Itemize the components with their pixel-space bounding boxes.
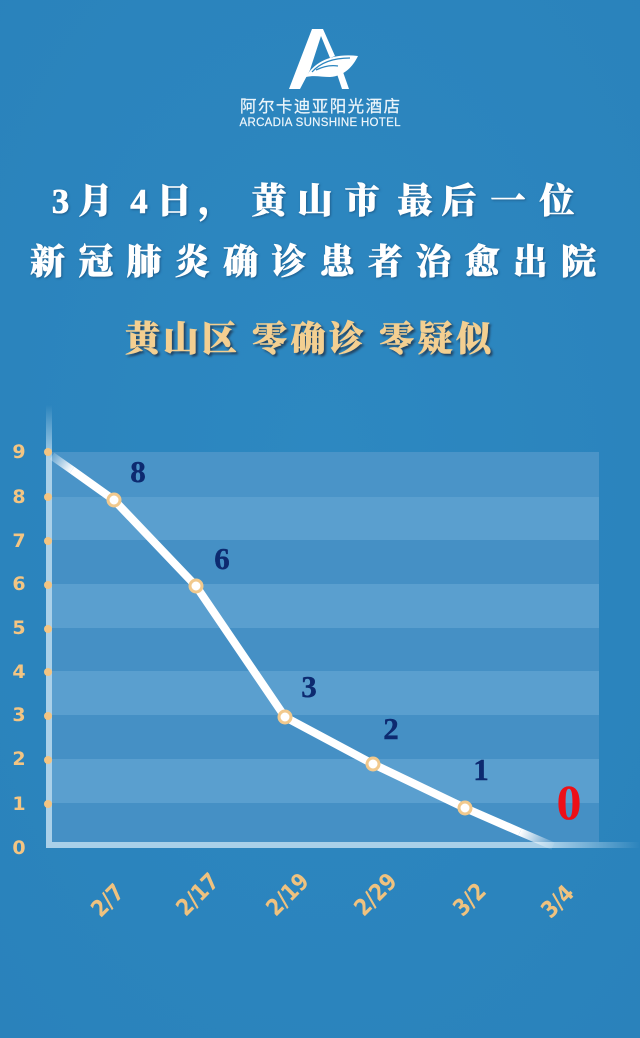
logo mark: letter A with leaf [289,29,358,89]
y axis labels: 8 [12,486,26,508]
y axis labels: 6 [12,573,26,595]
data line [52,456,553,846]
hotel logo [240,29,401,129]
y axis labels: 7 [12,530,26,552]
y axis labels [12,441,26,859]
x axis labels: 3/2 [448,878,492,922]
x axis [46,842,640,848]
logo Chinese name: 阿尔卡迪亚阳光酒店 [240,97,400,116]
y axis ticks [44,448,52,808]
x axis labels: 2/7 [86,879,130,923]
y axis labels: 9 [12,441,26,463]
title line 2: 新冠肺炎确诊患者治愈出院 [30,242,596,282]
x axis labels: 2/19 [261,868,315,922]
zero value: 0 [556,774,582,830]
subtitle: 黄山区 零确诊 零疑似 [125,319,494,359]
x axis labels: 2/17 [171,868,225,922]
title [30,181,596,282]
x axis labels: 3/4 [536,880,580,924]
y axis labels: 1 [12,793,26,815]
y axis labels: 4 [12,661,26,683]
y axis labels: 2 [12,748,26,770]
data values: 8 [130,454,146,489]
logo English name: ARCADIA SUNSHINE HOTEL [240,117,401,129]
data values: 3 [301,669,317,704]
data values: 6 [214,541,230,576]
data values [130,454,489,787]
y axis [46,405,52,848]
x axis labels: 2/29 [349,868,403,922]
x axis labels [86,868,580,924]
data values: 2 [383,711,399,746]
y axis labels: 3 [12,704,26,726]
chart bands [52,452,599,842]
y axis labels: 5 [12,617,26,639]
title line 1: 3月4日，黄山市最后一位 [52,181,575,222]
line chart [12,405,640,924]
y axis labels: 0 [12,837,26,859]
data points [108,494,471,814]
data values: 1 [473,752,489,787]
